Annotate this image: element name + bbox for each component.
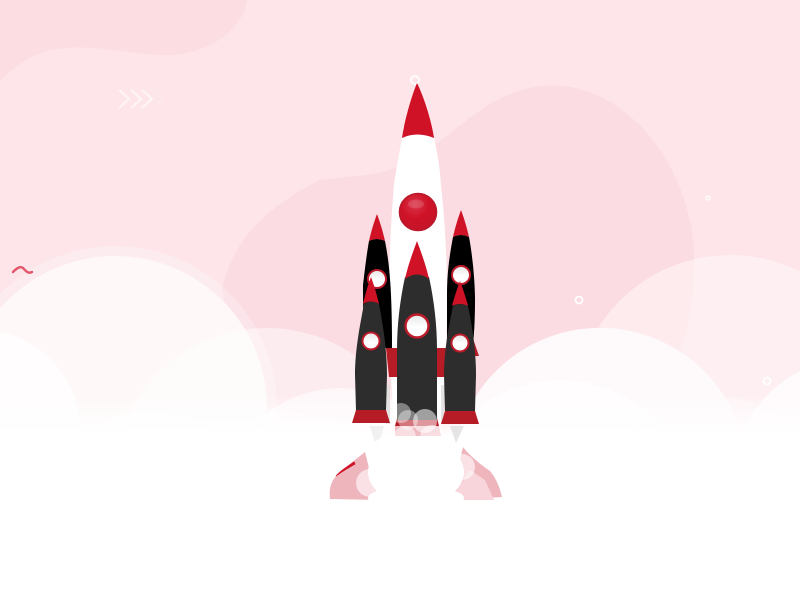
- puff: pink 1: [394, 426, 416, 448]
- cloud: right back: [574, 255, 800, 567]
- porthole glint: [408, 200, 424, 208]
- flame: left accent: [336, 462, 355, 476]
- puff: pink 2: [420, 425, 444, 449]
- flame: right: [450, 447, 502, 500]
- left body: [355, 302, 387, 410]
- cloud: centre small: [242, 388, 438, 440]
- rear left fin: [362, 336, 392, 348]
- smoke puffs: [356, 403, 475, 510]
- left window: [362, 332, 380, 350]
- chevrons: [119, 90, 162, 108]
- flames: [330, 447, 502, 500]
- cloud: lower left: [74, 412, 226, 440]
- left nose: [363, 277, 379, 304]
- left fin: [352, 410, 390, 423]
- centre exhaust pink: [395, 426, 441, 436]
- rear right window: [452, 266, 470, 284]
- plume: left: [370, 426, 384, 450]
- centre nose: [405, 241, 429, 279]
- ground white: [0, 436, 800, 600]
- small ring: right: [706, 196, 710, 200]
- puff: left low: [356, 469, 384, 497]
- rear left booster: [362, 214, 392, 348]
- main rocket porthole: [400, 194, 436, 230]
- small ring: middle: [576, 296, 582, 304]
- front centre booster: [395, 241, 441, 436]
- plume: right: [450, 426, 464, 443]
- small ring: lower right: [764, 378, 770, 384]
- front left booster: [352, 277, 390, 423]
- rear right booster: [447, 210, 479, 356]
- cloud: centre-left back: [118, 328, 416, 440]
- squiggle: [13, 267, 32, 273]
- cloud: right front: [450, 380, 670, 440]
- cloud layers: [0, 246, 800, 600]
- main rocket: [386, 83, 449, 430]
- rear left body: [363, 239, 392, 348]
- cloud: right far: [647, 398, 800, 558]
- puff: base: [368, 486, 464, 510]
- puff: left: [370, 438, 398, 466]
- rear left nose: [369, 214, 385, 241]
- sliver left: [385, 385, 390, 424]
- right window: [452, 334, 468, 352]
- cloud: left halo: [0, 246, 277, 570]
- cloud: left main: [0, 256, 267, 560]
- large centre blob: [222, 86, 694, 440]
- cloud fade: [0, 395, 800, 437]
- front right booster: [441, 281, 479, 424]
- sliver right: [441, 385, 445, 424]
- main rocket band: [386, 348, 449, 377]
- centre fin: [395, 418, 439, 426]
- flame: left: [330, 452, 380, 500]
- rear right fin: [460, 330, 479, 356]
- flame: right highlight: [450, 470, 494, 500]
- centre window: [406, 314, 428, 338]
- right body: [444, 304, 476, 411]
- cloud: right edge: [735, 360, 800, 590]
- right fin: [441, 411, 479, 424]
- puff: grey 2: [398, 410, 418, 430]
- exhaust plumes: [370, 426, 464, 450]
- main rocket body: [389, 134, 447, 430]
- puff: grey 3: [413, 409, 437, 433]
- rear left window: [368, 270, 386, 288]
- puff: right: [449, 454, 475, 480]
- main rocket nose: [402, 83, 434, 138]
- rear right body: [447, 235, 475, 345]
- right nose: [452, 281, 468, 306]
- centre body: [397, 274, 437, 420]
- rear right nose: [453, 210, 469, 237]
- small ring: top: [411, 76, 419, 84]
- cloud: right main: [457, 328, 743, 440]
- shadow slivers: [385, 385, 445, 424]
- puff: grey 1: [391, 403, 411, 423]
- top-left blob: [0, 0, 247, 82]
- cloud: far left: [0, 330, 80, 530]
- puff: large white: [368, 439, 464, 505]
